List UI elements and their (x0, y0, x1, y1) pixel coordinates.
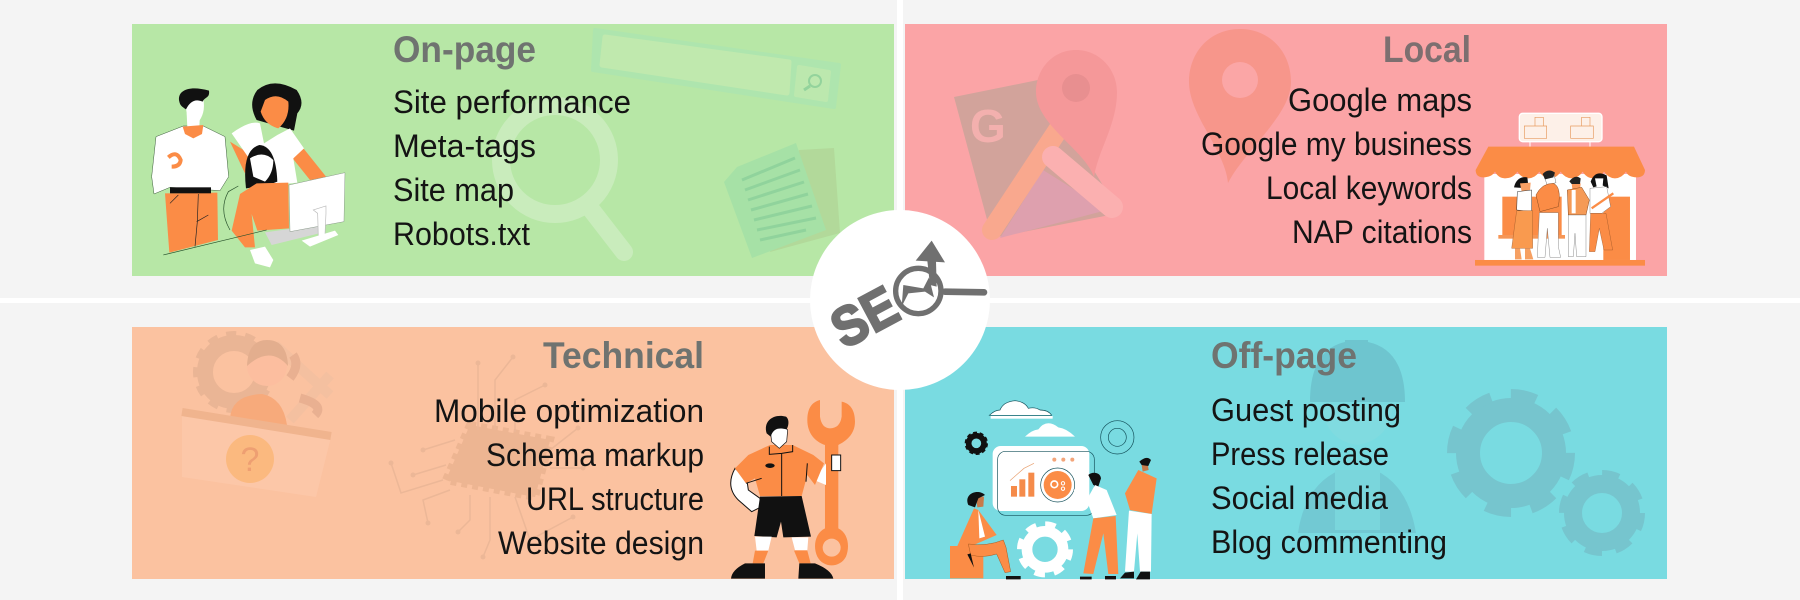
faded icon: support person with gear: ? (241, 441, 259, 479)
faded icon: google maps (954, 50, 1120, 238)
panel: off-page (905, 327, 1667, 579)
text list: technical items: Schema markup (486, 437, 704, 473)
panel: local (905, 24, 1667, 276)
on-page background (132, 24, 894, 276)
heading: off-page: Off-page (1211, 335, 1357, 376)
text list: technical items: URL structure (526, 481, 704, 517)
faded icon: support person with gear (182, 334, 331, 497)
text list: local items: NAP citations (1292, 214, 1472, 250)
text list: off-page items (1211, 392, 1447, 560)
badge circle (810, 210, 990, 390)
technical background (132, 327, 894, 579)
SEO logo with magnifier and arrow: SE (821, 274, 908, 360)
faded icon: large gear (1452, 394, 1570, 512)
text list: on-page items: Site performance (393, 84, 631, 120)
illustration: storefront with people (1475, 113, 1645, 266)
illustration: mechanic with wrench (731, 400, 855, 579)
heading: local: Local (1383, 29, 1471, 70)
faded icon: search bar (593, 30, 839, 107)
local background (905, 24, 1667, 276)
text list: technical items (434, 393, 704, 561)
faded icon: circuit chip (388, 354, 586, 560)
faded icon: engineer (1298, 340, 1416, 533)
faded icon: documents (724, 143, 840, 258)
illustration: team analysing chart (950, 401, 1157, 579)
central SEO badge (810, 210, 990, 390)
text list: local items: Local keywords (1266, 170, 1472, 206)
faded icon: small gear (1563, 474, 1641, 552)
text list: on-page items: Site map (393, 172, 514, 208)
illustration: three people at a computer (152, 83, 345, 267)
text list: technical items: Website design (498, 525, 704, 561)
panel: technical (132, 327, 894, 579)
faded icon: location pin (1189, 29, 1291, 183)
SEO logo with magnifier and arrow (821, 241, 984, 360)
heading: technical: Technical (543, 335, 704, 376)
text list: local items: Google my business (1201, 126, 1472, 162)
text list: off-page items: Press release (1211, 436, 1389, 472)
text list: on-page items (393, 84, 631, 252)
heading: on-page: On-page (393, 29, 536, 70)
faded icon: magnifier (501, 106, 624, 252)
text list: on-page items: Robots.txt (393, 216, 530, 252)
text list: off-page items: Guest posting (1211, 392, 1401, 428)
faded icon: google maps: G (970, 100, 1006, 152)
text list: local items: Google maps (1288, 82, 1472, 118)
text list: off-page items: Blog commenting (1211, 524, 1447, 560)
off-page background (905, 327, 1667, 579)
text list: off-page items: Social media (1211, 480, 1388, 516)
text list: local items (1201, 82, 1472, 250)
panel: on-page (132, 24, 894, 276)
text list: technical items: Mobile optimization (434, 393, 704, 429)
text list: on-page items: Meta-tags (393, 128, 536, 164)
